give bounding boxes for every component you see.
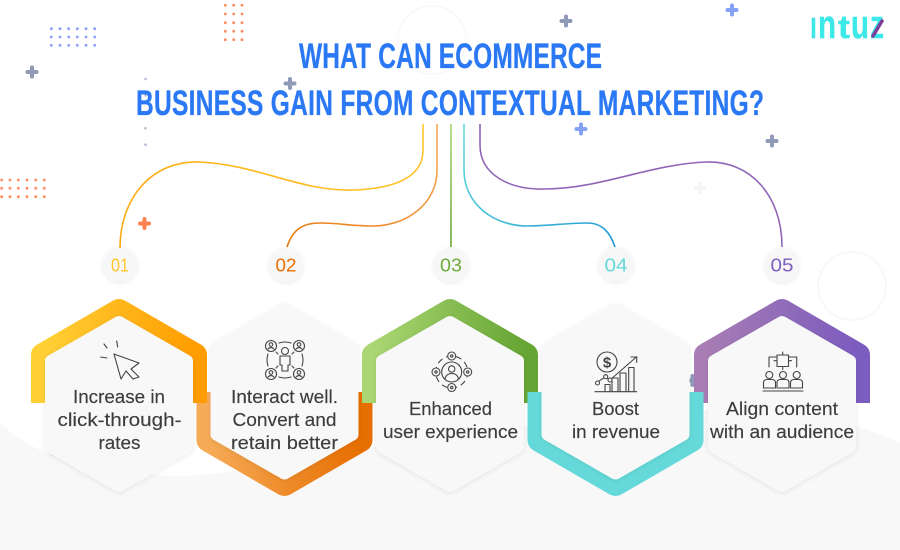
- hexagon band 1: yellow: [31, 299, 207, 403]
- background swoosh: [0, 409, 900, 550]
- number badge 05: [765, 248, 799, 282]
- connector 01: [120, 124, 423, 248]
- connector 05: [480, 124, 782, 247]
- icon: revenue chart: [595, 352, 637, 392]
- card 2 text: retain better: [231, 433, 338, 453]
- card 1: click-through rates: [51, 322, 187, 486]
- icon: revenue chart: $: [603, 354, 612, 372]
- title: WHAT CAN ECOMMERCE: [299, 38, 602, 76]
- connector 02: [287, 124, 437, 247]
- hexagon band 3: green: [362, 299, 538, 403]
- hexagon band 2: orange: [196, 392, 372, 496]
- connector 04: [464, 124, 615, 247]
- number badge 01: 01: [111, 256, 129, 276]
- title: BUSINESS GAIN FROM CONTEXTUAL MARKETING?: [136, 85, 764, 123]
- card 3 text: user experience: [383, 422, 518, 442]
- card 5 text: with an audience: [709, 422, 854, 442]
- plus markers: [28, 6, 776, 385]
- logo: Intuz: n: [818, 3, 836, 47]
- icon: user with orbit: [432, 352, 472, 392]
- decorative background circles: [398, 6, 886, 320]
- logo: Intuz: t: [838, 9, 850, 45]
- card 4: boost in revenue: [548, 310, 684, 474]
- card 3 text: [383, 399, 518, 442]
- number badge 04: [599, 248, 633, 282]
- card 1 text: [58, 387, 182, 453]
- logo: Intuz: [810, 3, 884, 47]
- icon: audience with puzzle: [763, 352, 803, 391]
- logo: Intuz: z: [870, 3, 884, 47]
- card 5 text: Align content: [726, 399, 838, 419]
- number badge 02: 02: [276, 256, 296, 276]
- number badge 05: 05: [770, 256, 794, 276]
- dot grid: blue: [50, 27, 96, 47]
- card 2 text: Interact well.: [231, 387, 338, 407]
- icon: cursor: [101, 341, 139, 379]
- logo: Intuz: u: [851, 3, 869, 47]
- card 4 text: in revenue: [572, 422, 660, 442]
- connector 03: [450, 124, 452, 247]
- card 3: enhanced user experience: [382, 322, 518, 486]
- dots: grey vertical: [52, 78, 147, 455]
- card 5 text: [709, 399, 854, 442]
- dot grid: orange top: [224, 4, 243, 41]
- number badge 03: [434, 248, 468, 282]
- title: [136, 38, 764, 123]
- number badge 04: 04: [604, 256, 628, 276]
- card 2 text: Convert and: [232, 410, 336, 430]
- card 2 text: [231, 387, 338, 453]
- hexagon band 4: teal: [528, 392, 704, 496]
- card 1 text: click-through-: [58, 410, 182, 430]
- card 4 text: [572, 399, 660, 442]
- card 1 text: rates: [98, 433, 140, 453]
- card 4 text: Boost: [592, 399, 639, 419]
- number badge 02: [269, 248, 303, 282]
- dot grid: orange left: [0, 179, 46, 198]
- card 1 text: Increase in: [73, 387, 165, 407]
- number badge 03: 03: [440, 256, 462, 276]
- logo: Intuz: I: [810, 13, 816, 45]
- card 3 text: Enhanced: [409, 399, 492, 419]
- icon: people network: [266, 340, 304, 380]
- number badge 01: [103, 248, 137, 282]
- card 2: interact well: [216, 310, 352, 474]
- card 5: align content: [709, 322, 854, 486]
- hexagon band 5: purple: [694, 299, 870, 403]
